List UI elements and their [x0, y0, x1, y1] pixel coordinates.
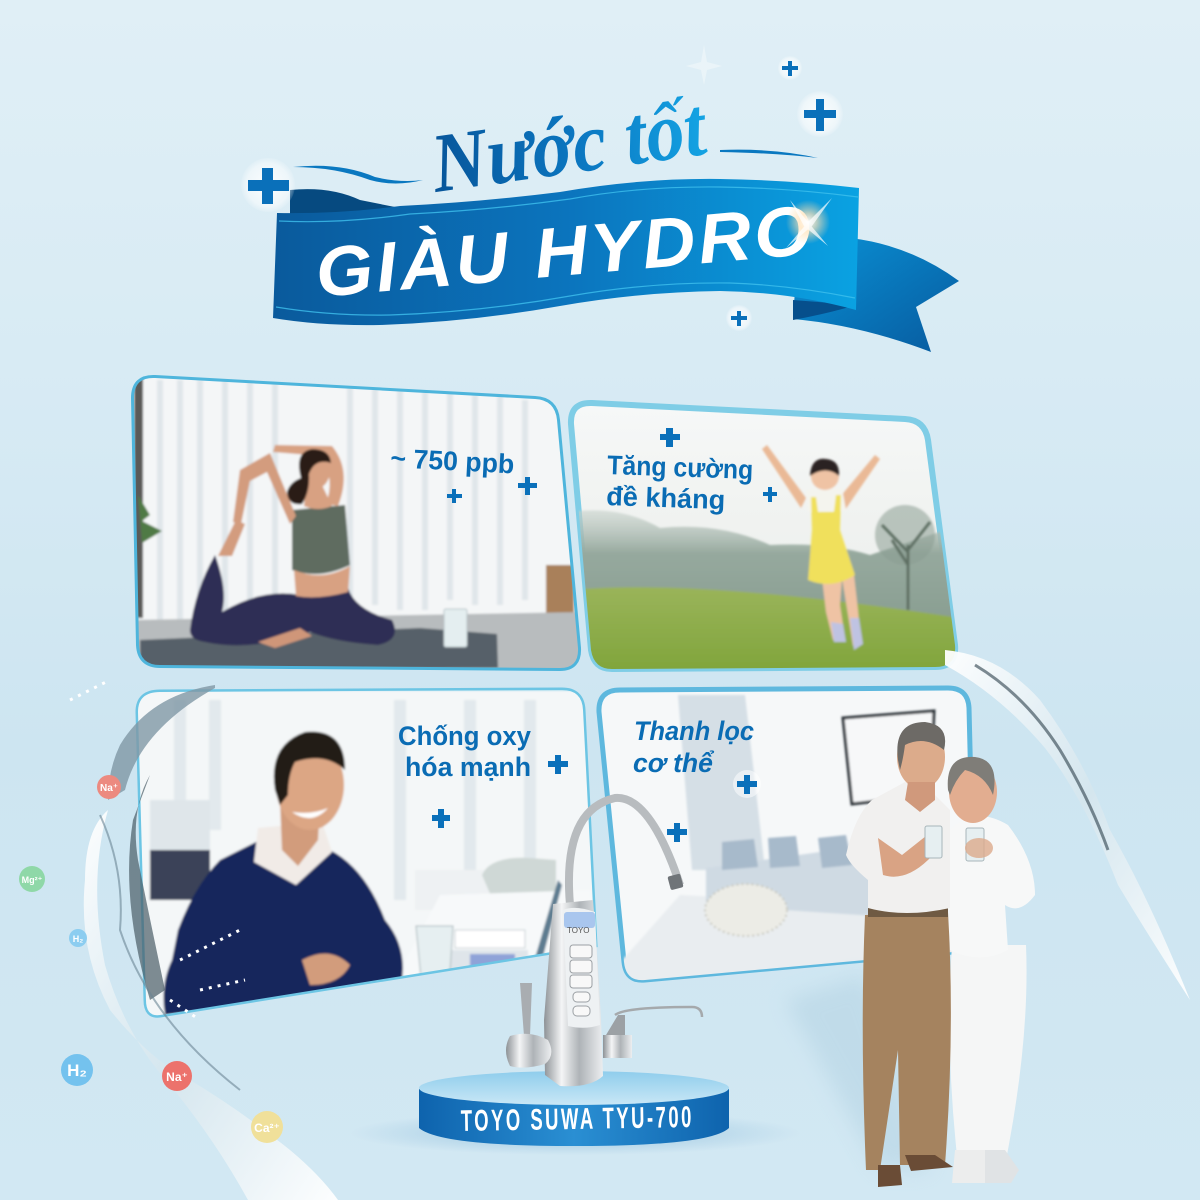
plus icons panel 2 [660, 428, 777, 502]
ribbon banner [273, 179, 959, 352]
woman [948, 757, 1035, 1183]
couple [785, 722, 1035, 1187]
molecule: H2 small: H₂ [73, 934, 83, 944]
sofa [706, 835, 875, 916]
distant tree [875, 505, 935, 610]
decorative swoosh line right [720, 150, 818, 158]
plus icons panel 4 [667, 770, 761, 842]
panel 4: living room [599, 688, 985, 992]
floor [138, 610, 578, 668]
label: Chống oxy hóa mạnh: hóa mạnh [405, 752, 531, 782]
curtains [134, 378, 575, 622]
label: Chống oxy hóa mạnh [398, 721, 531, 782]
product name: TOYO SUWA TYU-700 [461, 1101, 694, 1138]
sparkle decoration [686, 45, 722, 85]
woman [190, 445, 395, 648]
curtain [678, 695, 765, 870]
grass [586, 586, 956, 669]
spout [569, 798, 680, 905]
plus bubble: top right large [797, 91, 843, 137]
label: Thanh lọc cơ thể: cơ thể [633, 748, 715, 778]
plus bubble: ribbon left [241, 158, 295, 212]
picture frame [843, 711, 934, 804]
podium shadow [350, 1111, 800, 1155]
molecule: H2 large: H₂ [67, 1061, 87, 1080]
molecule: Na+ bottom [162, 1061, 192, 1091]
label: Thanh lọc cơ thể [633, 716, 754, 778]
yoga mat [140, 628, 498, 670]
molecule: Ca2+ [251, 1111, 283, 1143]
plus icons panel 3 [432, 755, 568, 828]
water splash: left [70, 680, 338, 1200]
faucet [506, 798, 702, 1086]
ribbon tail fold [793, 300, 856, 320]
man [164, 732, 403, 1015]
plus: top small [778, 56, 802, 80]
label: Thanh lọc cơ thể: Thanh lọc [634, 716, 754, 746]
water splash: right [945, 650, 1190, 1000]
molecule: H2 large [61, 1054, 93, 1086]
child [762, 445, 880, 650]
podium [350, 1071, 800, 1155]
control panel [563, 908, 600, 1028]
left handle [520, 983, 532, 1036]
molecule: H2 small [69, 929, 87, 947]
water glass [414, 924, 454, 973]
panel 3: office man [135, 690, 600, 1020]
molecule: Na+ top [97, 775, 121, 799]
label: Chống oxy hóa mạnh: Chống oxy [398, 721, 531, 751]
body [544, 900, 603, 1086]
lens flare [786, 198, 832, 248]
pouf [705, 884, 787, 936]
trees [570, 510, 960, 618]
molecule: Ca2+: Ca²⁺ [254, 1121, 280, 1135]
ribbon heading: GIÀU HYDRO: GIÀU HYDRO [313, 191, 817, 312]
ribbon inner highlight lines [276, 187, 858, 315]
decorative swoosh lines left [293, 166, 423, 184]
plus: under ribbon [726, 305, 752, 331]
right valve [603, 1035, 632, 1058]
ribbon tail [793, 238, 959, 352]
water glass [444, 609, 467, 647]
control panel: TOYO [567, 926, 590, 935]
label: Tăng cường đề kháng: đề kháng [606, 481, 726, 515]
label: Tăng cường đề kháng [606, 450, 754, 515]
molecule: Na+ bottom: Na⁺ [166, 1070, 188, 1084]
office background [135, 690, 600, 1020]
molecule: Na+ top: Na⁺ [100, 783, 118, 794]
panel 2: child in field [570, 403, 960, 675]
label: 750 ppb: ~ 750 ppb [390, 443, 515, 479]
molecule: Mg2+: Mg²⁺ [22, 875, 43, 885]
molecule: Mg2+ [19, 866, 45, 892]
couple shadow [785, 975, 930, 1170]
ribbon main [273, 179, 859, 325]
ribbon back fold [290, 189, 400, 225]
label: Tăng cường đề kháng: Tăng cường [607, 450, 754, 485]
title: Nước tốt: Nước tốt [425, 80, 713, 211]
plus icons panel 1 [447, 477, 537, 503]
man [846, 722, 953, 1187]
panel 1: yoga [130, 375, 585, 675]
floor and rug [624, 896, 952, 980]
